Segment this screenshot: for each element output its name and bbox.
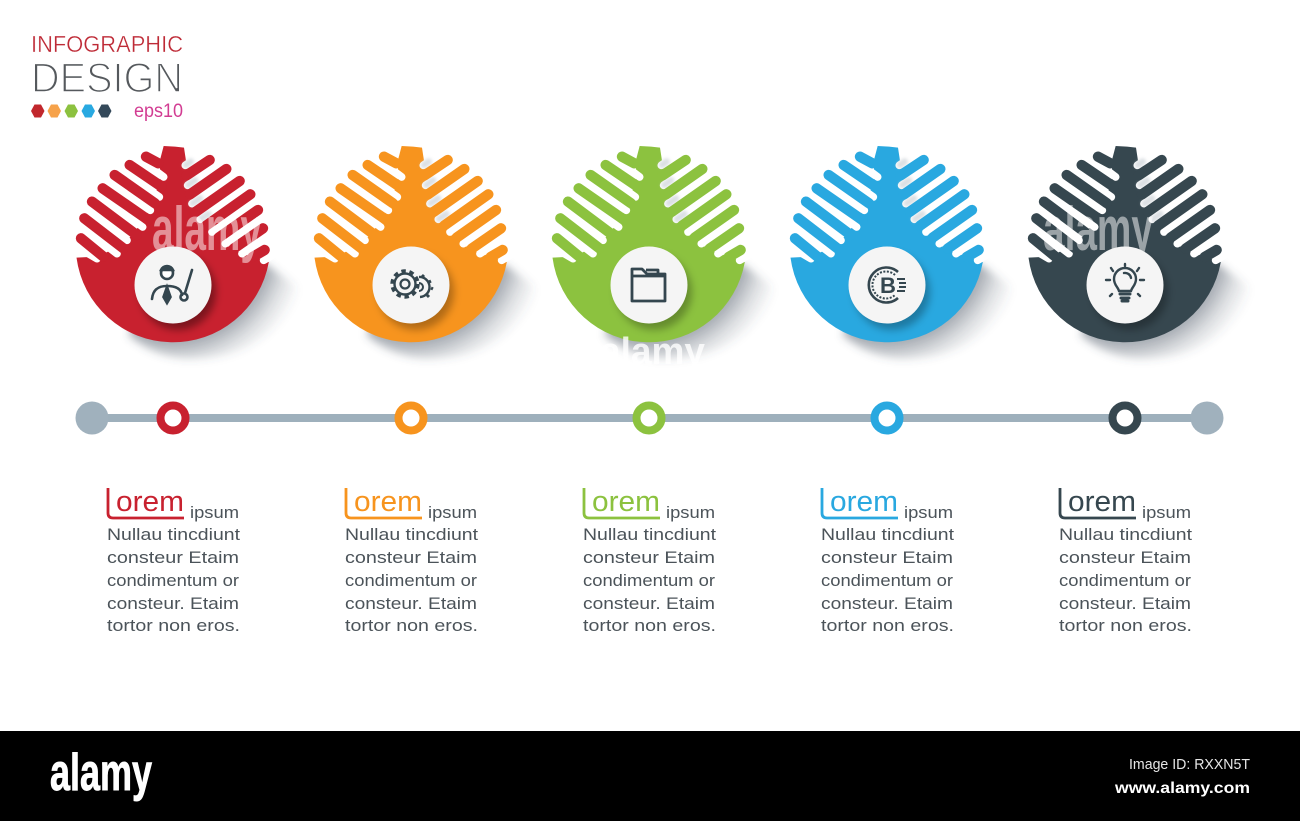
icon disc: folder xyxy=(610,246,692,330)
footer logo: alamy xyxy=(50,744,152,802)
image id: Image ID: RXXN5T xyxy=(1129,756,1250,773)
icon: gears xyxy=(392,271,433,297)
text block: dark xyxy=(1059,486,1192,635)
text block: green: consteur. Etaim xyxy=(583,594,715,613)
panel: green badge xyxy=(543,145,773,359)
version label: eps10 xyxy=(134,101,183,122)
text block: dark: ipsum xyxy=(1142,503,1191,522)
text block: green xyxy=(583,486,716,635)
icon: bitcoin coin: B xyxy=(880,273,896,298)
text block: orange: orem xyxy=(354,486,422,518)
node: orange xyxy=(398,406,424,430)
text block: blue: orem xyxy=(830,486,898,518)
timeline end cap xyxy=(1190,402,1224,434)
panel: blue badge xyxy=(781,145,1011,359)
text block: red xyxy=(107,486,240,635)
text block: blue: condimentum or xyxy=(821,571,953,590)
text block: orange: condimentum or xyxy=(345,571,477,590)
icon: person with pointer xyxy=(152,266,192,303)
text block: blue: tortor non eros. xyxy=(821,616,954,635)
text block: green: condimentum or xyxy=(583,571,715,590)
text block: orange: consteur. Etaim xyxy=(345,594,477,613)
text block: dark: consteur Etaim xyxy=(1059,548,1191,567)
title logo xyxy=(31,31,183,122)
panel: red badge xyxy=(67,145,297,359)
text block: dark: tortor non eros. xyxy=(1059,616,1192,635)
text block: green: consteur Etaim xyxy=(583,548,715,567)
watermark on dark badge: alamy xyxy=(1043,195,1153,264)
text block: orange: Nullau tincdiunt xyxy=(345,525,478,544)
watermark on green badge: alamy xyxy=(600,331,705,373)
text block: blue: Nullau tincdiunt xyxy=(821,525,954,544)
text block: red: tortor non eros. xyxy=(107,616,240,635)
text block: blue: consteur. Etaim xyxy=(821,594,953,613)
watermark on red badge: alamy xyxy=(152,195,262,264)
text block: orange: consteur Etaim xyxy=(345,548,477,567)
icon: light bulb xyxy=(1106,264,1144,301)
timeline start cap xyxy=(76,402,108,434)
text block: orange xyxy=(345,486,478,635)
text block: blue: consteur Etaim xyxy=(821,548,953,567)
text block: red: Nullau tincdiunt xyxy=(107,525,240,544)
text block: dark: consteur. Etaim xyxy=(1059,594,1191,613)
website: www.alamy.com xyxy=(1114,780,1250,797)
node: blue xyxy=(874,406,900,430)
text block: blue: ipsum xyxy=(904,503,953,522)
icon disc: idea xyxy=(1086,246,1168,330)
footer bar xyxy=(0,731,1300,821)
text block: blue xyxy=(821,486,954,635)
icon disc: bitcoin xyxy=(848,246,930,330)
text block: green: ipsum xyxy=(666,503,715,522)
text block: dark: condimentum or xyxy=(1059,571,1191,590)
timeline xyxy=(76,402,1224,434)
icon disc: manager xyxy=(134,246,216,330)
text block: red: consteur Etaim xyxy=(107,548,239,567)
text block: dark: Nullau tincdiunt xyxy=(1059,525,1192,544)
node: dark xyxy=(1112,406,1138,430)
node: red xyxy=(160,406,186,430)
heading: design: DESIGN xyxy=(31,54,183,101)
text block: orange: tortor non eros. xyxy=(345,616,478,635)
icon: folder xyxy=(632,269,665,301)
text block: dark: orem xyxy=(1068,486,1136,518)
icon disc: settings xyxy=(372,246,454,330)
text block: green: tortor non eros. xyxy=(583,616,716,635)
panel: orange badge xyxy=(305,145,535,359)
heading: infographic: INFOGRAPHIC xyxy=(31,31,183,57)
text block: green: Nullau tincdiunt xyxy=(583,525,716,544)
text block: red: orem xyxy=(116,486,184,518)
colored hexagons xyxy=(31,104,112,118)
text block: red: ipsum xyxy=(190,503,239,522)
node: green xyxy=(636,406,662,430)
text block: red: condimentum or xyxy=(107,571,239,590)
text block: orange: ipsum xyxy=(428,503,477,522)
panel: dark badge xyxy=(1019,145,1249,359)
text block: green: orem xyxy=(592,486,660,518)
text block: red: consteur. Etaim xyxy=(107,594,239,613)
